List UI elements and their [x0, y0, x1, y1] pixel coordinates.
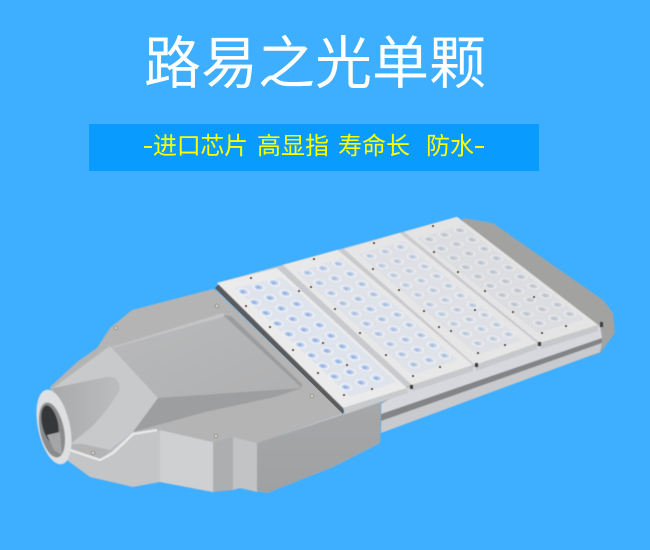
banner: feature list: 寿命长: [338, 133, 410, 160]
housing screws: [91, 304, 314, 455]
LED module 4: [404, 217, 598, 349]
raised cover top: [112, 315, 302, 398]
LED module 3: [344, 233, 537, 371]
banner: feature list: 高显指: [257, 133, 329, 160]
housing highlight edge: [67, 430, 157, 460]
left light facet: [53, 346, 158, 450]
cover dark facets: [133, 388, 302, 432]
module screws: [245, 225, 567, 396]
LED module 1: [217, 268, 408, 414]
conduit neck: [53, 377, 120, 446]
module notches: [410, 322, 603, 389]
housing front wall: [60, 402, 381, 493]
LED module 2: [283, 250, 473, 391]
banner: feature list: 进口芯片: [153, 133, 248, 160]
module backing: [217, 217, 598, 408]
housing top surface: [50, 289, 343, 460]
banner: feature list: [89, 124, 539, 171]
title: 路易之光单颗: [144, 32, 486, 96]
housing: [30, 289, 381, 493]
gap between housing and modules: [215, 284, 345, 414]
conduit opening: [30, 387, 78, 467]
banner: feature list: 防水: [426, 133, 474, 160]
back plate: [382, 218, 615, 430]
rail under modules: [381, 325, 602, 433]
